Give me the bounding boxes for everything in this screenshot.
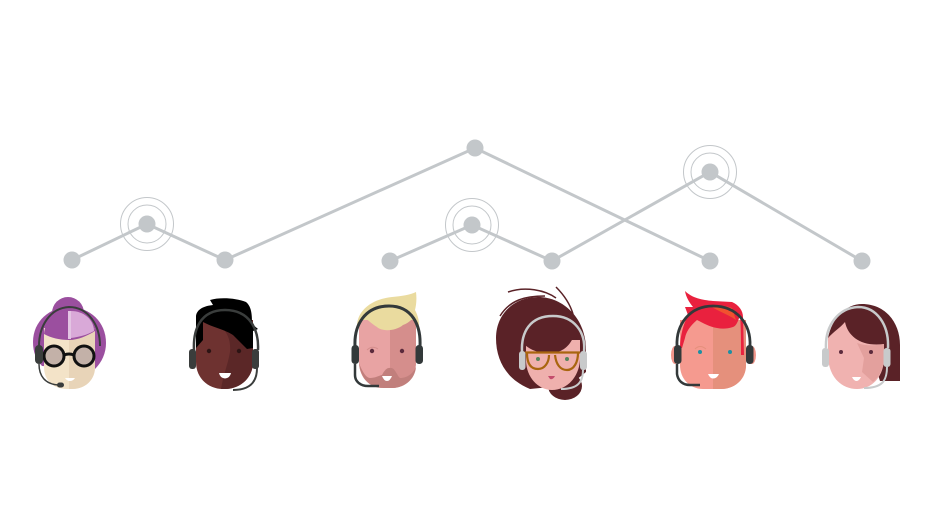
earpieces: [674, 345, 754, 364]
hair bun: [548, 372, 582, 400]
face shadow: [857, 343, 884, 382]
microphone boom: [864, 367, 887, 388]
face shadow: [713, 320, 746, 389]
eyes: [370, 349, 404, 353]
headset: [39, 307, 100, 346]
earpieces: [519, 351, 587, 370]
earpiece: [35, 345, 43, 364]
hair mass: [496, 297, 586, 389]
face: [44, 328, 95, 389]
fringe: [358, 303, 416, 330]
network nodes: [64, 140, 870, 270]
mouth: [548, 376, 555, 379]
headset: [522, 316, 584, 352]
eyes: [839, 350, 873, 354]
mouth: [382, 376, 392, 381]
headset: [355, 306, 420, 346]
earpieces: [189, 349, 259, 369]
face: [680, 320, 746, 389]
network diagram: [64, 140, 870, 270]
mouth: [219, 373, 231, 378]
network line: second path: [390, 172, 862, 261]
face: [828, 322, 884, 389]
face shadow: [69, 328, 95, 389]
hair strands: [500, 287, 573, 316]
earpieces: [822, 348, 890, 367]
signal rings: right: [684, 146, 736, 198]
eyes: [698, 350, 732, 354]
microphone: [57, 382, 64, 388]
beard: [359, 363, 416, 388]
eyes: [207, 349, 241, 353]
eyelids: [695, 346, 736, 349]
ears: [671, 346, 756, 364]
hair: [828, 304, 900, 381]
glasses: [525, 352, 580, 370]
signal rings: left: [120, 198, 174, 250]
headset: [826, 307, 888, 348]
face shadow: [220, 320, 253, 389]
network line: first path: [72, 148, 710, 261]
face: [196, 320, 253, 389]
hair: [196, 298, 258, 349]
hair streak: [68, 311, 71, 339]
microphone boom: [677, 364, 700, 385]
eyes: [536, 357, 569, 361]
face shadow: [390, 320, 416, 388]
face: [526, 340, 580, 390]
earpieces: [352, 345, 423, 364]
face: [359, 320, 416, 388]
hair bun: [52, 297, 84, 329]
agent 3: blond hair and beard: [352, 292, 423, 388]
microphone boom: [561, 370, 583, 389]
mouth: [65, 378, 75, 381]
fringe highlight: [71, 311, 94, 338]
eyelids: [367, 347, 408, 350]
agent 4: dark hair with orange glasses: [496, 287, 587, 400]
microphone boom: [355, 364, 379, 386]
mouth: [852, 377, 861, 381]
agent 6: long dark hair: [822, 304, 900, 389]
hair highlight: [710, 306, 736, 320]
headset: [194, 310, 258, 350]
agent 2: black hair, dark skin: [189, 298, 259, 390]
fringe: [525, 318, 577, 353]
round glasses: [44, 346, 94, 366]
hair: [680, 291, 744, 355]
agent 1: purple hair with round glasses: [33, 297, 106, 389]
microphone boom: [39, 364, 58, 385]
agent 5: red hair with teal eyes: [671, 291, 756, 389]
headset: [677, 306, 750, 346]
hair back: [33, 307, 106, 369]
microphone boom: [233, 368, 257, 390]
signal rings: middle: [446, 198, 498, 252]
mouth: [708, 374, 719, 378]
hair: [357, 292, 419, 332]
fringe: [44, 310, 95, 340]
